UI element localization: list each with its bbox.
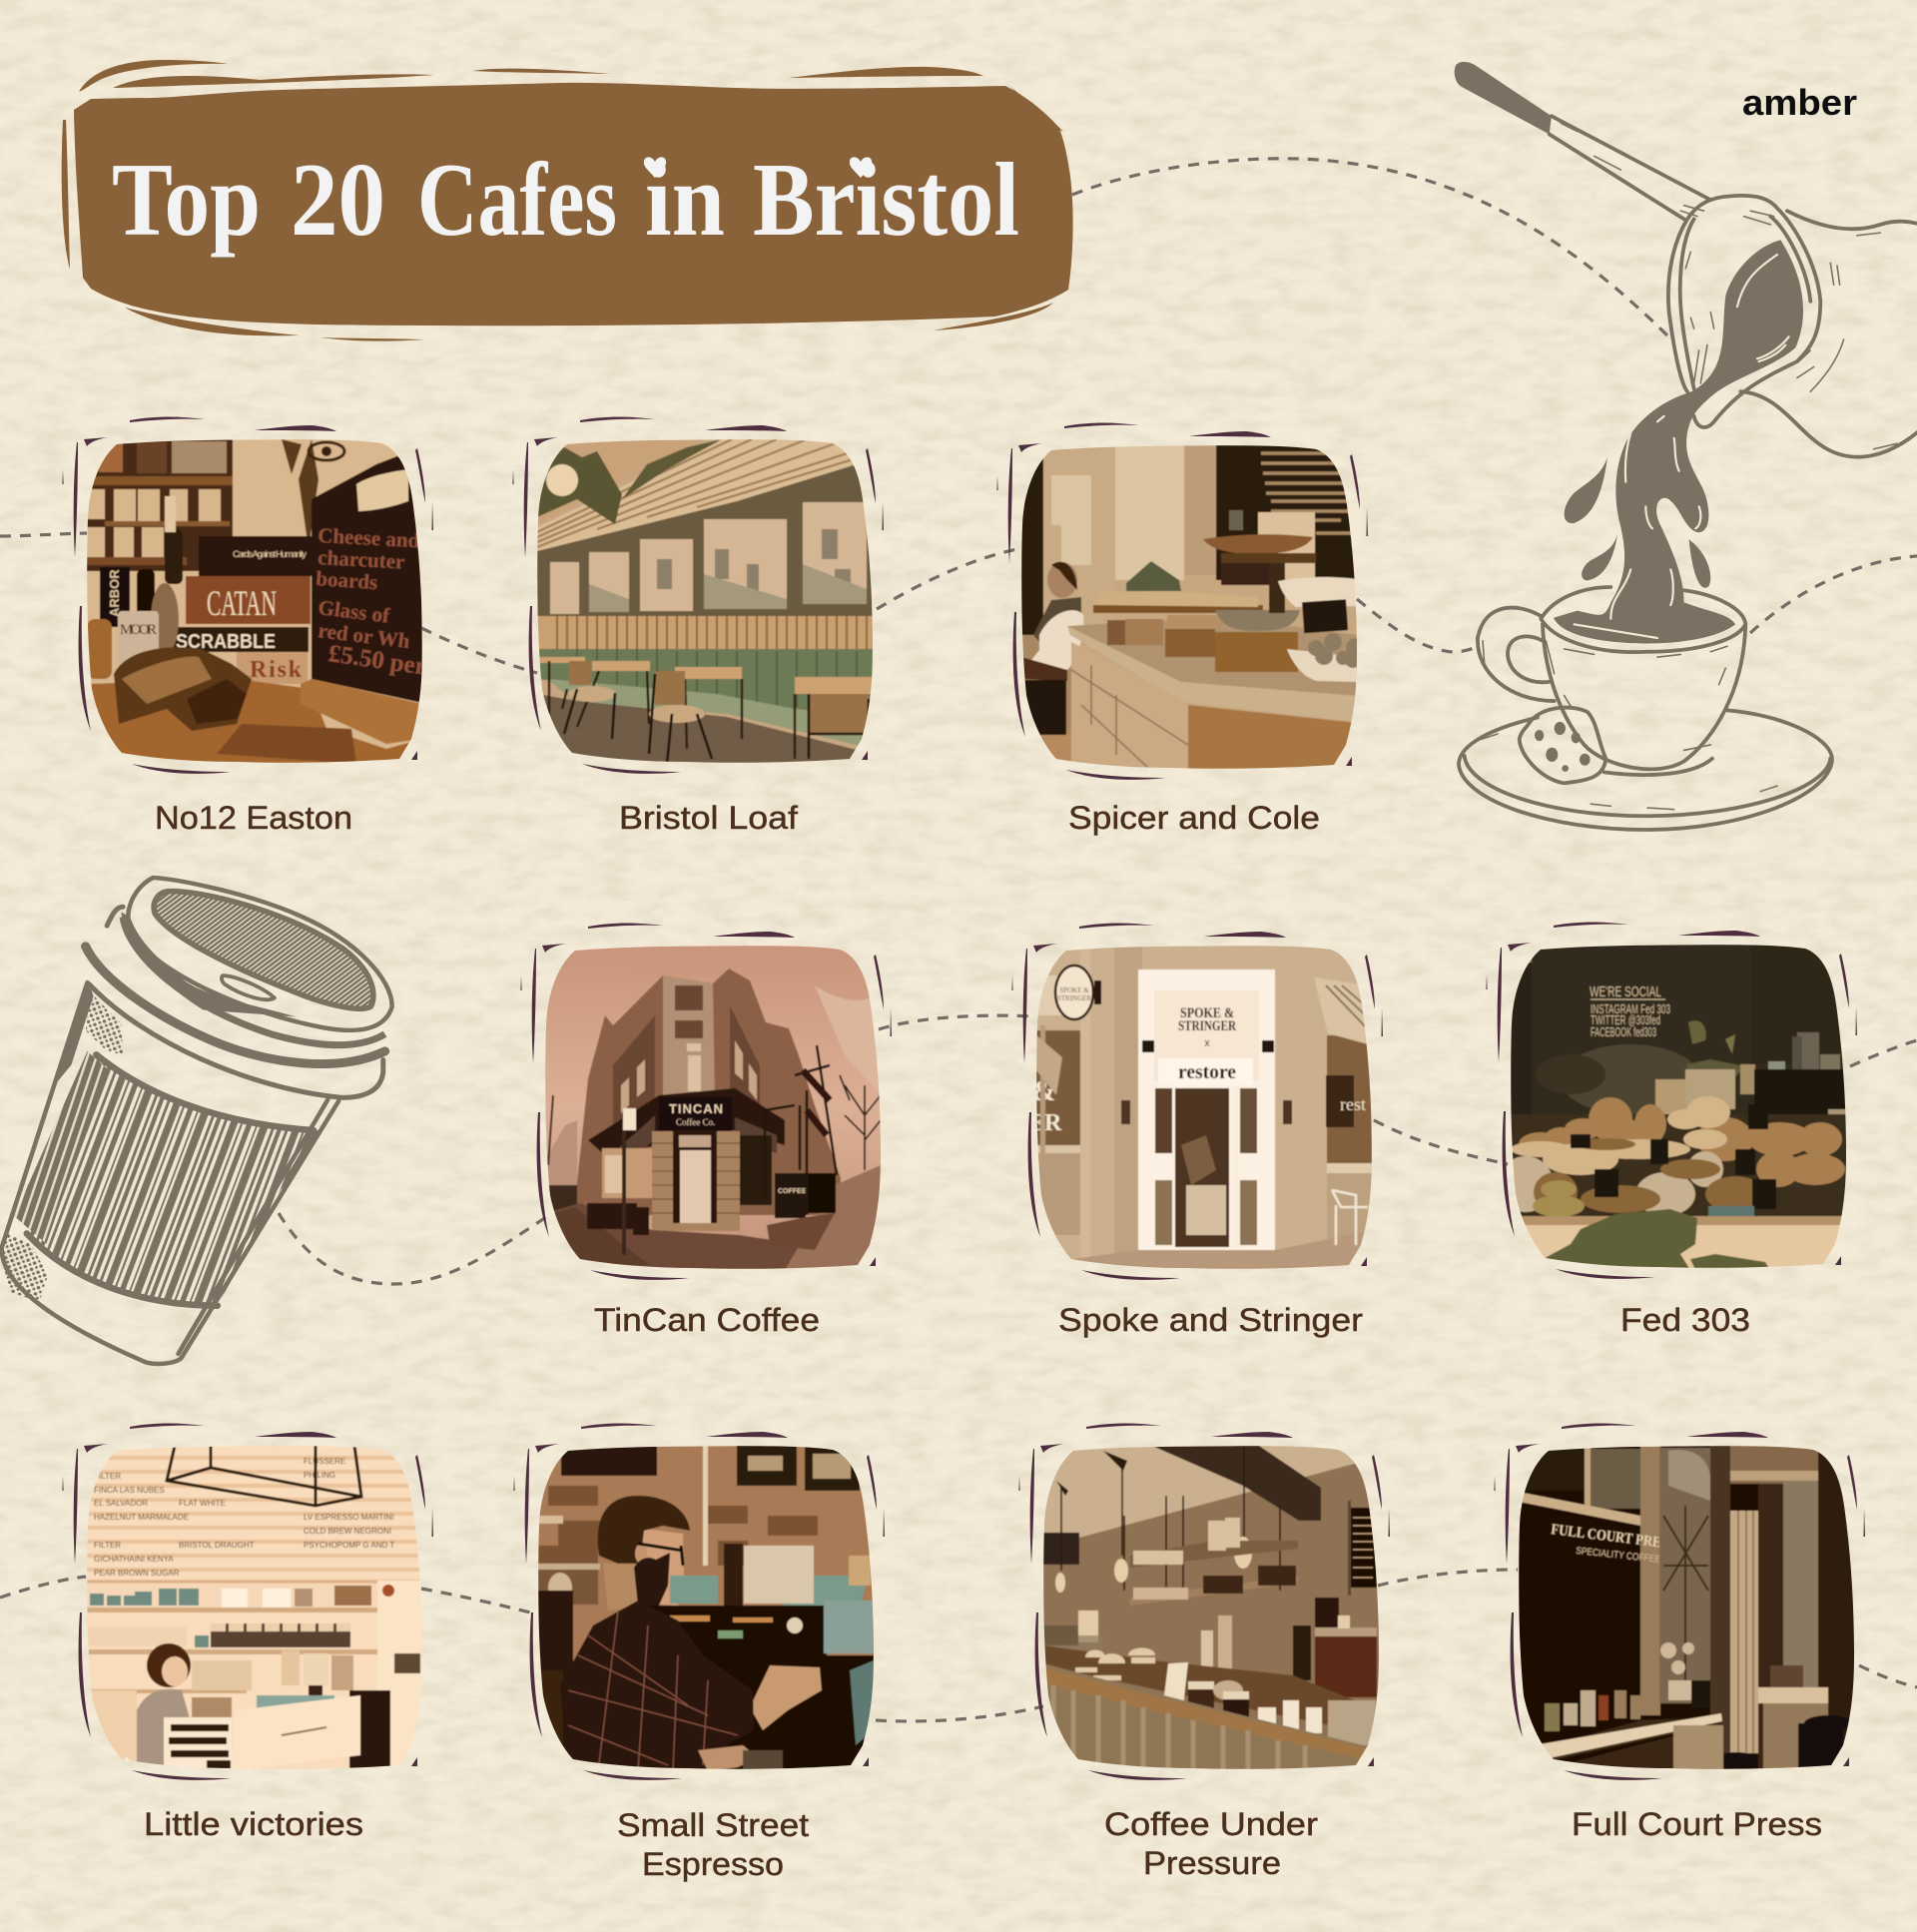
frame strokes — [513, 1424, 885, 1780]
stipple shading — [2, 992, 123, 1302]
photo: No12 Easton: £5.50 per — [326, 640, 428, 681]
photo: Spoke and Stringer: SPOKE & — [1059, 986, 1089, 994]
photo: No12 Easton: boards — [316, 566, 378, 594]
brand wordmark: amber — [1742, 82, 1857, 123]
photo: Small Street Espresso — [538, 1446, 878, 1771]
photo: Little victories: LV ESPRESSO MARTINI — [304, 1513, 393, 1522]
label: Coffee Under Pressure — [1104, 1806, 1318, 1881]
frame strokes — [520, 923, 892, 1280]
label: Small Street Espresso: Espresso — [642, 1846, 784, 1882]
lid — [86, 878, 392, 1097]
photo: Little victories: COLD BREW NEGRONI — [304, 1527, 391, 1536]
frame strokes — [1494, 1424, 1865, 1780]
label: Bristol Loaf: Bristol Loaf — [619, 800, 798, 836]
photo: Spoke and Stringer: rest — [1340, 1094, 1366, 1114]
photo: Little victories: FLUSSERE — [304, 1457, 345, 1466]
photo: Fed 303: FACEBOOK fed303 — [1591, 1024, 1656, 1039]
coffee cup — [1478, 587, 1745, 769]
photo: No12 Easton: SCRABBLE — [176, 631, 276, 653]
photo: Fed 303: TWITTER @303fed — [1591, 1012, 1660, 1027]
frame strokes — [1011, 923, 1383, 1280]
title text: 20 — [291, 141, 385, 258]
photo: Spoke and Stringer: restore — [1178, 1061, 1236, 1083]
label: Full Court Press: Full Court Press — [1572, 1806, 1822, 1842]
illustration: coffee pot pouring into cup — [1455, 62, 1917, 830]
photo: Fed 303: INSTAGRAM Fed 303 — [1591, 1001, 1670, 1016]
illustration: takeaway coffee cup — [2, 878, 392, 1364]
photo: No12 Easton: CATAN — [207, 583, 277, 623]
photo: Fed 303 — [1498, 945, 1850, 1275]
photo: Fed 303: WE'RE SOCIAL — [1590, 983, 1661, 1000]
frame strokes — [512, 417, 884, 774]
cup outline — [2, 982, 338, 1364]
dense shading on left of cup — [14, 1051, 107, 1244]
frame strokes — [62, 1424, 433, 1780]
title text: in — [645, 141, 725, 258]
photo: Little victories: PEAR BROWN SUGAR — [94, 1569, 180, 1578]
photo: Spoke and Stringer — [1028, 946, 1376, 1271]
photo: Little victories: FILTER — [94, 1541, 121, 1550]
card: Spoke and Stringer — [1011, 923, 1383, 1338]
photo: Spicer and Cole — [1021, 445, 1366, 771]
photo: Spoke and Stringer: x — [1204, 1037, 1210, 1049]
photo: No12 Easton: Risk — [250, 657, 303, 683]
card: Full Court Press — [1494, 1424, 1865, 1842]
card: No12 Easton — [62, 417, 433, 836]
photo: No12 Easton: Glass of — [317, 595, 392, 628]
card: Spicer and Cole — [996, 423, 1368, 836]
photo: Bristol Loaf — [537, 439, 877, 769]
photo: Little victories: EL SALVADOR — [94, 1499, 148, 1508]
pouring coffee stream — [1554, 240, 1803, 643]
label: Fed 303: Fed 303 — [1620, 1302, 1750, 1338]
photo: No12 Easton: Cards Against Humanity — [233, 549, 307, 560]
title text: Cafes — [417, 141, 617, 258]
coffee highlights — [1575, 255, 1789, 638]
cup sleeve — [30, 1054, 314, 1306]
label: Little victories: Little victories — [144, 1806, 363, 1842]
photo: Little victories: FLAT WHITE — [179, 1499, 226, 1508]
label: Small Street Espresso — [617, 1807, 809, 1882]
photo: Full Court Press: SPECIALITY COFFEE — [1576, 1546, 1661, 1566]
frame strokes — [62, 417, 433, 774]
photo: Little victories: PHILING — [304, 1471, 335, 1480]
photo: No12 Easton: Cheese and — [318, 523, 420, 552]
photo: TinCan Coffee — [545, 946, 885, 1275]
frame strokes — [1486, 923, 1857, 1279]
photo: No12 Easton: charcuter — [318, 545, 405, 574]
title text: Top — [112, 141, 261, 258]
photo: Little victories: BRISTOL DRAUGHT — [179, 1541, 255, 1550]
photo: Spoke and Stringer: SPOKE & — [1180, 1005, 1234, 1021]
card: Fed 303 — [1486, 923, 1857, 1338]
photo: Spoke and Stringer: ER — [1028, 1110, 1062, 1136]
card: Little victories — [62, 1424, 433, 1842]
photo: No12 Easton: MOOR — [120, 622, 157, 638]
heart dots on the letter i — [644, 157, 872, 178]
frame strokes — [1018, 1424, 1390, 1780]
frame strokes — [996, 423, 1368, 780]
label: Spoke and Stringer: Spoke and Stringer — [1058, 1302, 1363, 1338]
saucer — [1459, 710, 1832, 830]
splash drops — [1565, 457, 1710, 588]
card: Bristol Loaf — [512, 417, 884, 836]
photo: Little victories: HAZELNUT MARMALADE — [94, 1513, 189, 1522]
photo: No12 Easton — [87, 439, 428, 769]
label: No12 Easton: No12 Easton — [155, 800, 352, 836]
photo: Full Court Press: FULL COURT PRESS — [1551, 1522, 1676, 1553]
photo: Little victories: FINCA LAS NUBES — [94, 1486, 165, 1495]
title banner — [62, 60, 1073, 341]
label: Spicer and Cole: Spicer and Cole — [1068, 800, 1320, 836]
photo: No12 Easton: red or Wh — [317, 618, 411, 653]
photo: Little victories: FILTER — [94, 1472, 121, 1481]
photo: TinCan Coffee: Coffee Co. — [676, 1117, 715, 1127]
title text — [112, 141, 1019, 258]
photo: TinCan Coffee: TINCAN — [669, 1101, 723, 1116]
photo: Little victories — [87, 1446, 426, 1771]
label: Coffee Under Pressure: Pressure — [1143, 1845, 1281, 1881]
photo: Coffee Under Pressure — [1043, 1446, 1383, 1771]
card: TinCan Coffee — [520, 923, 892, 1338]
photo: TinCan Coffee: COFFEE — [778, 1188, 807, 1195]
label: TinCan Coffee: TinCan Coffee — [594, 1302, 820, 1338]
photo: Little victories: GICHATHAINI KENYA — [94, 1555, 174, 1564]
photo: Spoke and Stringer: & — [1032, 1076, 1055, 1107]
photo: No12 Easton: ARBOR — [107, 569, 122, 617]
card: Small Street Espresso — [513, 1424, 885, 1882]
pot and hand — [1668, 196, 1917, 457]
cookie — [1520, 708, 1605, 783]
banner brush shape — [74, 83, 1073, 325]
photo: Spoke and Stringer: STRINGER — [1057, 994, 1091, 1002]
label: Coffee Under Pressure: Coffee Under — [1104, 1806, 1318, 1842]
banner brush accents — [62, 60, 1063, 341]
label: Small Street Espresso: Small Street — [617, 1807, 809, 1843]
pot handle — [1455, 62, 1710, 219]
photo: Little victories: PSYCHOPOMP G AND T — [304, 1541, 394, 1550]
title text: Bristol — [753, 141, 1019, 258]
card: Coffee Under Pressure — [1018, 1424, 1390, 1881]
photo: Full Court Press — [1519, 1446, 1858, 1771]
photo: Spoke and Stringer: STRINGER — [1178, 1018, 1236, 1034]
